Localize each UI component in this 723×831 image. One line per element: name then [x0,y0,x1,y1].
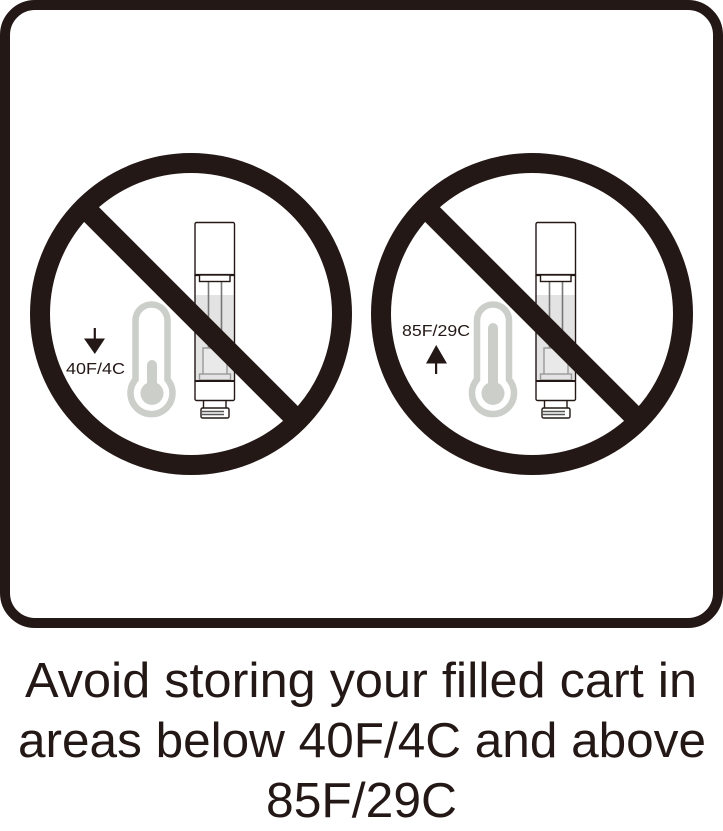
prohibition slash [429,211,635,417]
icon: thermometer high [472,304,514,414]
caption text: areas below 40F/4C and above [18,714,706,768]
icon: cartridge [195,222,234,418]
label: 40F/4C: 40F/4C [66,361,125,378]
rounded frame panel [5,5,718,623]
icon: down arrow [84,328,105,354]
prohibition ring [40,163,342,465]
caption text: Avoid storing your filled cart in [25,654,697,708]
panel: too cold prohibition [40,163,342,465]
panel: too hot prohibition [381,163,683,465]
prohibition slash [88,211,294,417]
caption text: 85F/29C [266,774,457,828]
icon: cartridge [536,222,576,418]
icon: thermometer low [130,304,173,414]
icon: up arrow [426,345,447,374]
caption text [18,654,706,828]
prohibition ring [381,163,683,465]
label: 85F/29C: 85F/29C [402,323,470,340]
